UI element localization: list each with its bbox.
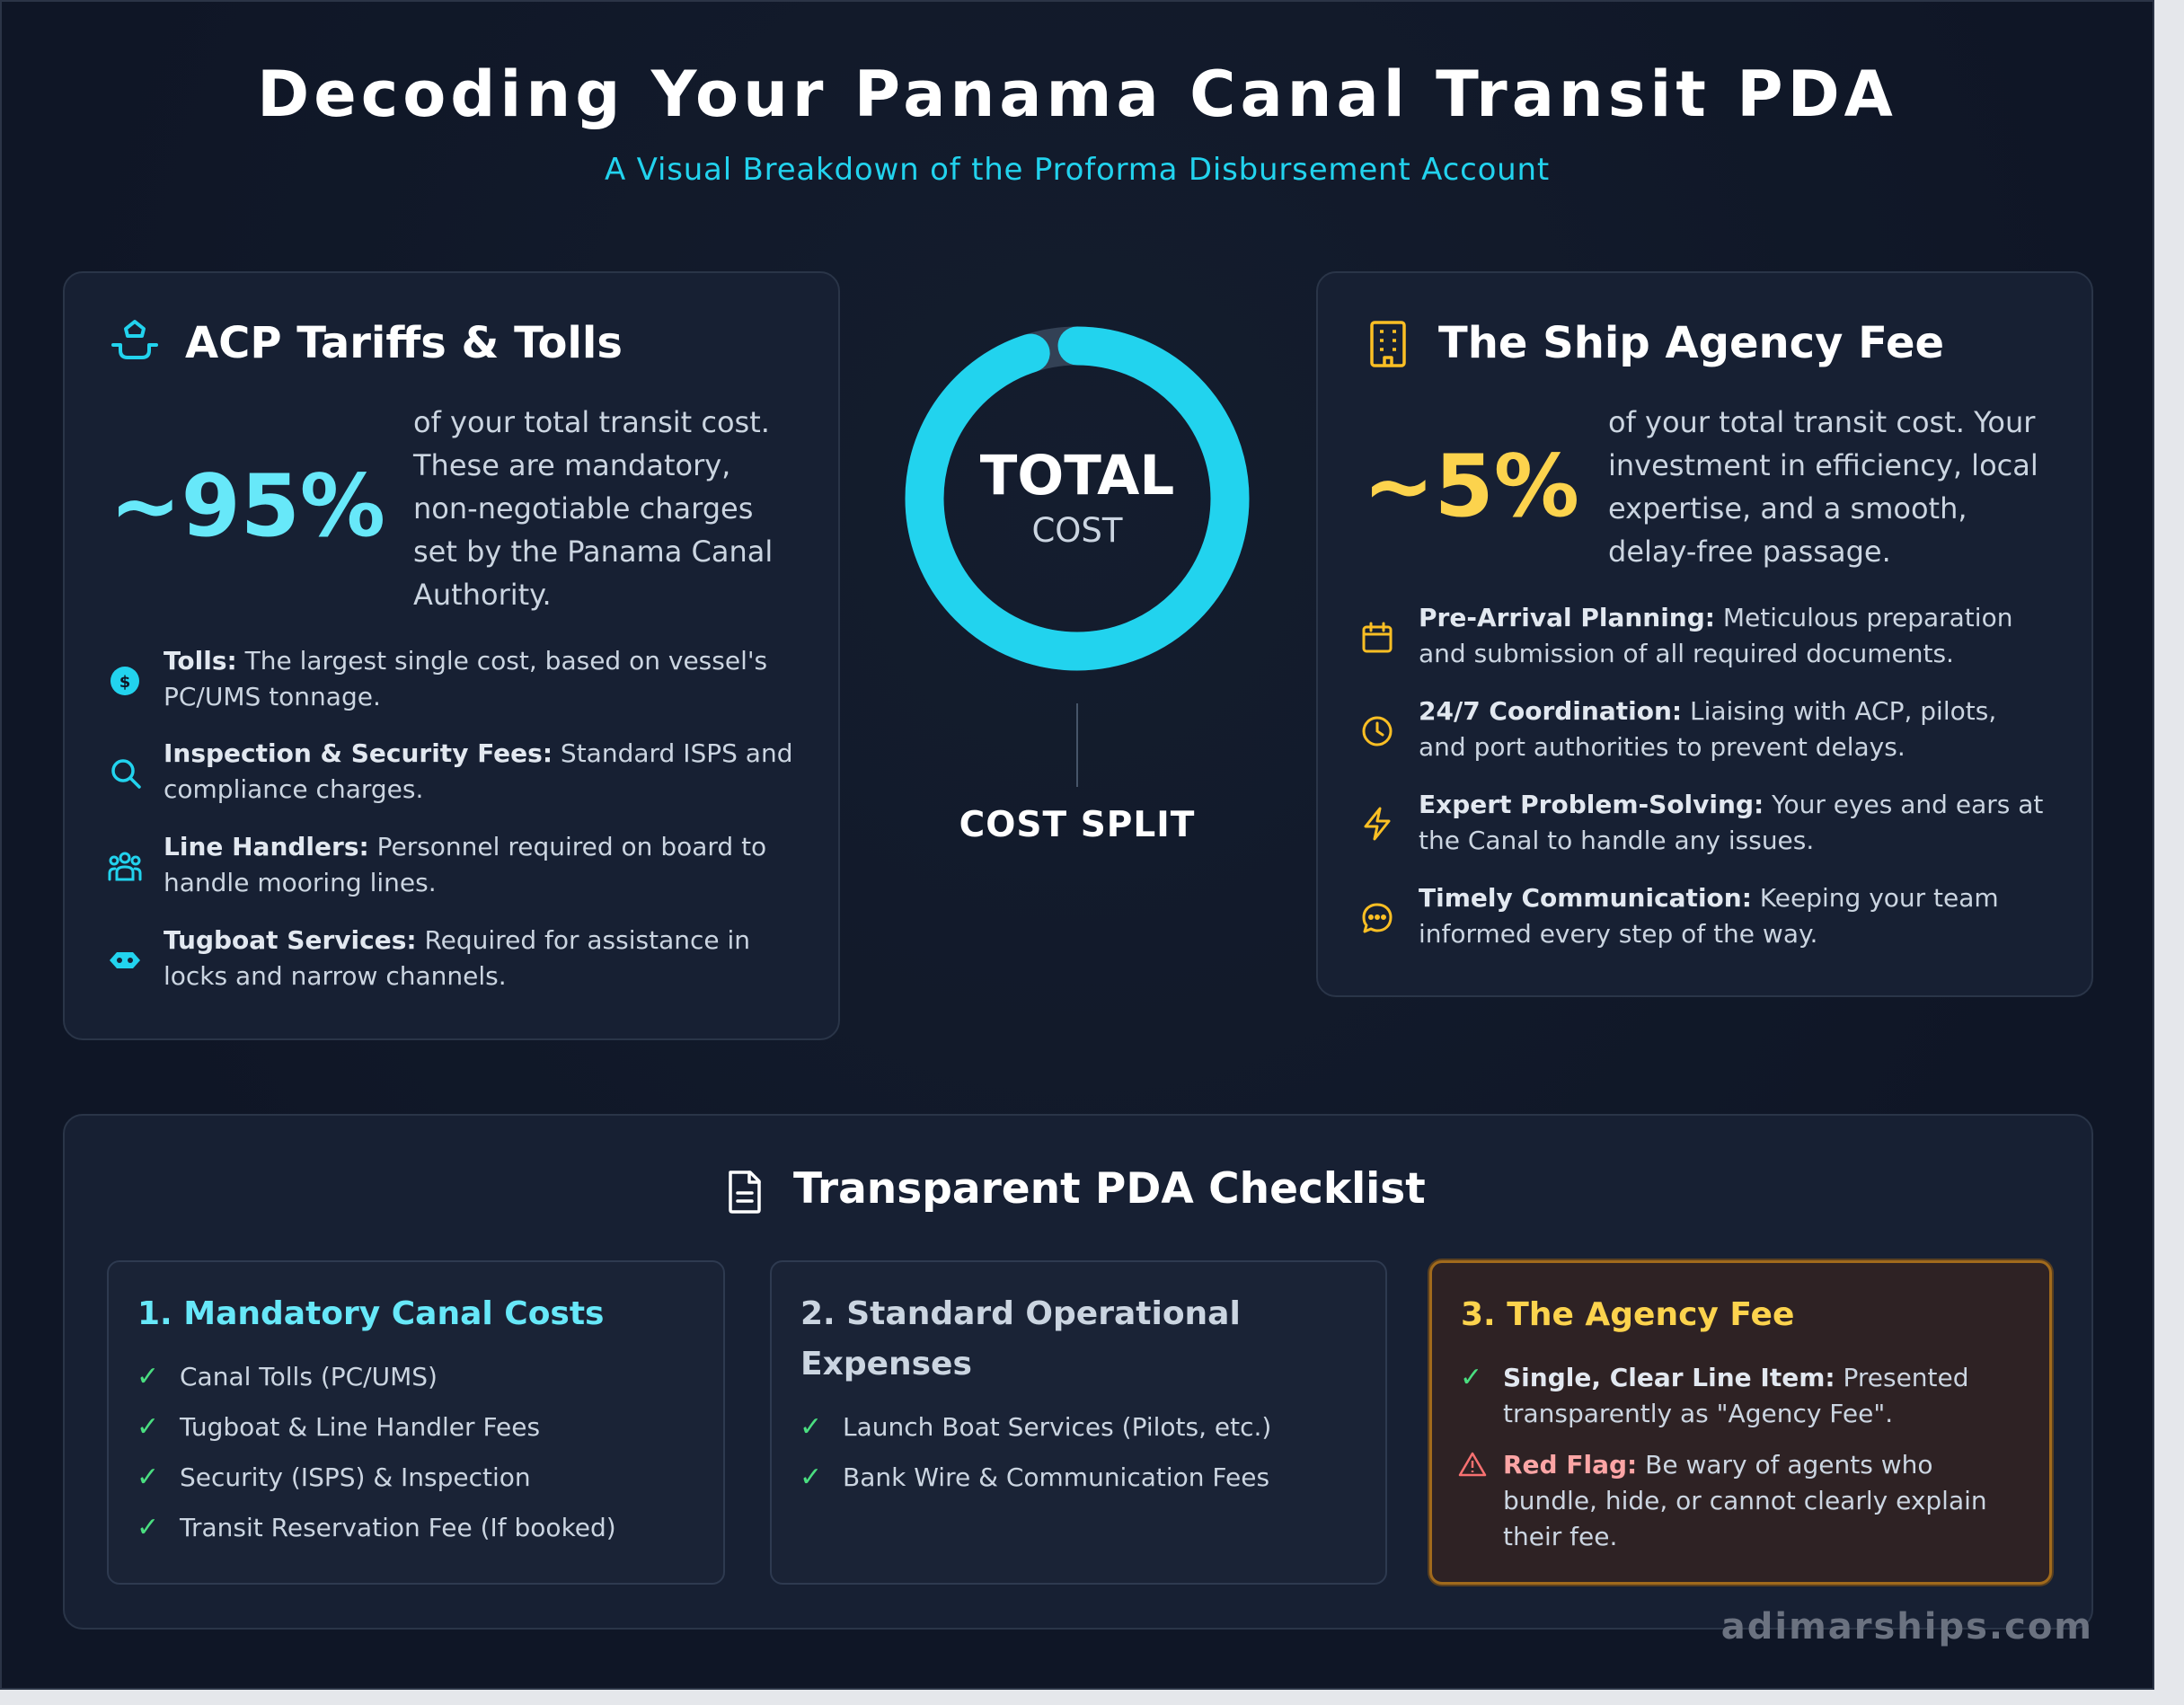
stat description: of your total transit cost. Your	[1608, 405, 2035, 439]
card: the agency fee: their fee.	[1503, 1522, 1617, 1551]
card: mandatory canal costs: Tugboat & Line Handler Fees	[180, 1412, 540, 1442]
icon: document	[729, 1171, 761, 1214]
panel: ship agency fee	[1316, 271, 2093, 997]
panel: transparent PDA checklist	[63, 1114, 2093, 1630]
bullet: tugboat	[110, 925, 750, 991]
label: cost split: COST SPLIT	[959, 805, 1195, 845]
card: standard operational expenses: Launch Boat Services (Pilots, etc.)	[843, 1412, 1271, 1442]
card: mandatory canal costs: ✓	[137, 1462, 159, 1493]
stat description: Authority.	[413, 578, 552, 612]
card: the agency fee	[1429, 1260, 2052, 1585]
bullet: coordination: 24/7 Coordination: Liaising with ACP, pilots,	[1419, 696, 1996, 726]
bullet: problem solving: Expert Problem-Solving: Your eyes and ears at	[1419, 790, 2043, 819]
bullet: tolls	[111, 646, 767, 711]
stat description: non-negotiable charges	[413, 491, 753, 526]
bullet: communication: informed every step of the way.	[1419, 919, 1817, 949]
card: mandatory canal costs	[107, 1260, 725, 1585]
bullet: tolls: $	[119, 673, 130, 692]
heading: ACP Tariffs & Tolls	[185, 318, 623, 368]
subtitle: A Visual Breakdown of the Proforma Disbursement Account	[605, 152, 1550, 188]
icon: captain hat	[111, 320, 158, 359]
bullet: tolls: PC/UMS tonnage.	[164, 682, 381, 711]
bullet: pre-arrival: Pre-Arrival Planning: Meticulous preparation	[1419, 603, 2012, 632]
card: the agency fee: ✓	[1460, 1362, 1482, 1393]
card: mandatory canal costs: Security (ISPS) & Inspection	[180, 1462, 531, 1492]
card: standard operational expenses: Bank Wire & Communication Fees	[843, 1462, 1269, 1492]
stat description: These are mandatory,	[413, 448, 730, 482]
bullet: problem solving: the Canal to handle any issues.	[1419, 826, 1814, 855]
card: the agency fee: transparently as "Agency Fee".	[1503, 1399, 1893, 1428]
icon: building	[1370, 321, 1406, 367]
stat description: delay-free passage.	[1608, 534, 1891, 569]
donut chart: total cost split	[906, 327, 1249, 670]
bullet: inspection: Inspection & Security Fees: Standard ISPS and	[164, 738, 792, 768]
card: standard operational expenses	[770, 1260, 1387, 1585]
card: standard operational expenses: 2. Standard Operational	[800, 1295, 1241, 1332]
bullet: coordination	[1362, 696, 1996, 762]
bullet: coordination: and port authorities to prevent delays.	[1419, 732, 1905, 762]
card: standard operational expenses: ✓	[800, 1462, 822, 1493]
bullet: line handlers: Line Handlers: Personnel required on board to	[164, 832, 766, 861]
bullet: problem solving	[1364, 790, 2043, 855]
stat description	[1608, 405, 2038, 569]
card: standard operational expenses: ✓	[800, 1411, 822, 1443]
heading: The Ship Agency Fee	[1438, 318, 1944, 368]
connector line	[1076, 703, 1078, 787]
bullet: inspection: compliance charges.	[164, 774, 423, 804]
donut chart: total cost split: COST	[1031, 511, 1123, 550]
card: mandatory canal costs: ✓	[137, 1512, 159, 1543]
title: Decoding Your Panama Canal Transit PDA	[257, 57, 1897, 131]
card: standard operational expenses: Expenses	[800, 1346, 972, 1383]
bullet: tolls: Tolls: The largest single cost, based on vessel's	[164, 646, 767, 676]
stat description	[413, 405, 773, 612]
stat: ~95%: ~95%	[110, 457, 385, 556]
card: mandatory canal costs: ✓	[137, 1411, 159, 1443]
bullet: tugboat: locks and narrow channels.	[164, 961, 507, 991]
stat description: set by the Panama Canal	[413, 534, 773, 569]
bullet: communication: Timely Communication: Keeping your team	[1419, 883, 1999, 913]
card: mandatory canal costs: Transit Reservation Fee (If booked)	[180, 1513, 616, 1542]
card: mandatory canal costs: Canal Tolls (PC/UMS)	[180, 1362, 438, 1391]
bullet: tugboat: Tugboat Services: Required for assistance in	[164, 925, 750, 955]
donut chart: total cost split: TOTAL	[980, 444, 1174, 508]
bullet: communication	[1362, 883, 1999, 949]
watermark: adimarships.com	[1721, 1606, 2093, 1648]
card: the agency fee: Red Flag: Be wary of agents who	[1503, 1450, 1933, 1480]
card: the agency fee: Single, Clear Line Item: Presented	[1503, 1363, 1969, 1392]
stat description: of your total transit cost.	[413, 405, 770, 439]
panel: ACP tariffs & tolls	[63, 271, 840, 1040]
bullet: line handlers	[108, 832, 766, 897]
stat description: investment in efficiency, local	[1608, 448, 2038, 482]
stat description: expertise, and a smooth,	[1608, 491, 1967, 526]
bullet: pre-arrival	[1362, 603, 2012, 668]
card: the agency fee: 3. The Agency Fee	[1461, 1296, 1794, 1333]
bullet: inspection	[111, 738, 792, 804]
card: mandatory canal costs: ✓	[137, 1361, 159, 1392]
checklist heading: Transparent PDA Checklist	[793, 1164, 1426, 1214]
card: mandatory canal costs: 1. Mandatory Canal Costs	[137, 1295, 604, 1332]
stat: ~5%: ~5%	[1363, 437, 1579, 536]
bullet: pre-arrival: and submission of all required documents.	[1419, 639, 1954, 668]
bullet: line handlers: handle mooring lines.	[164, 868, 437, 897]
card: the agency fee: bundle, hide, or cannot clearly explain	[1503, 1486, 1987, 1515]
